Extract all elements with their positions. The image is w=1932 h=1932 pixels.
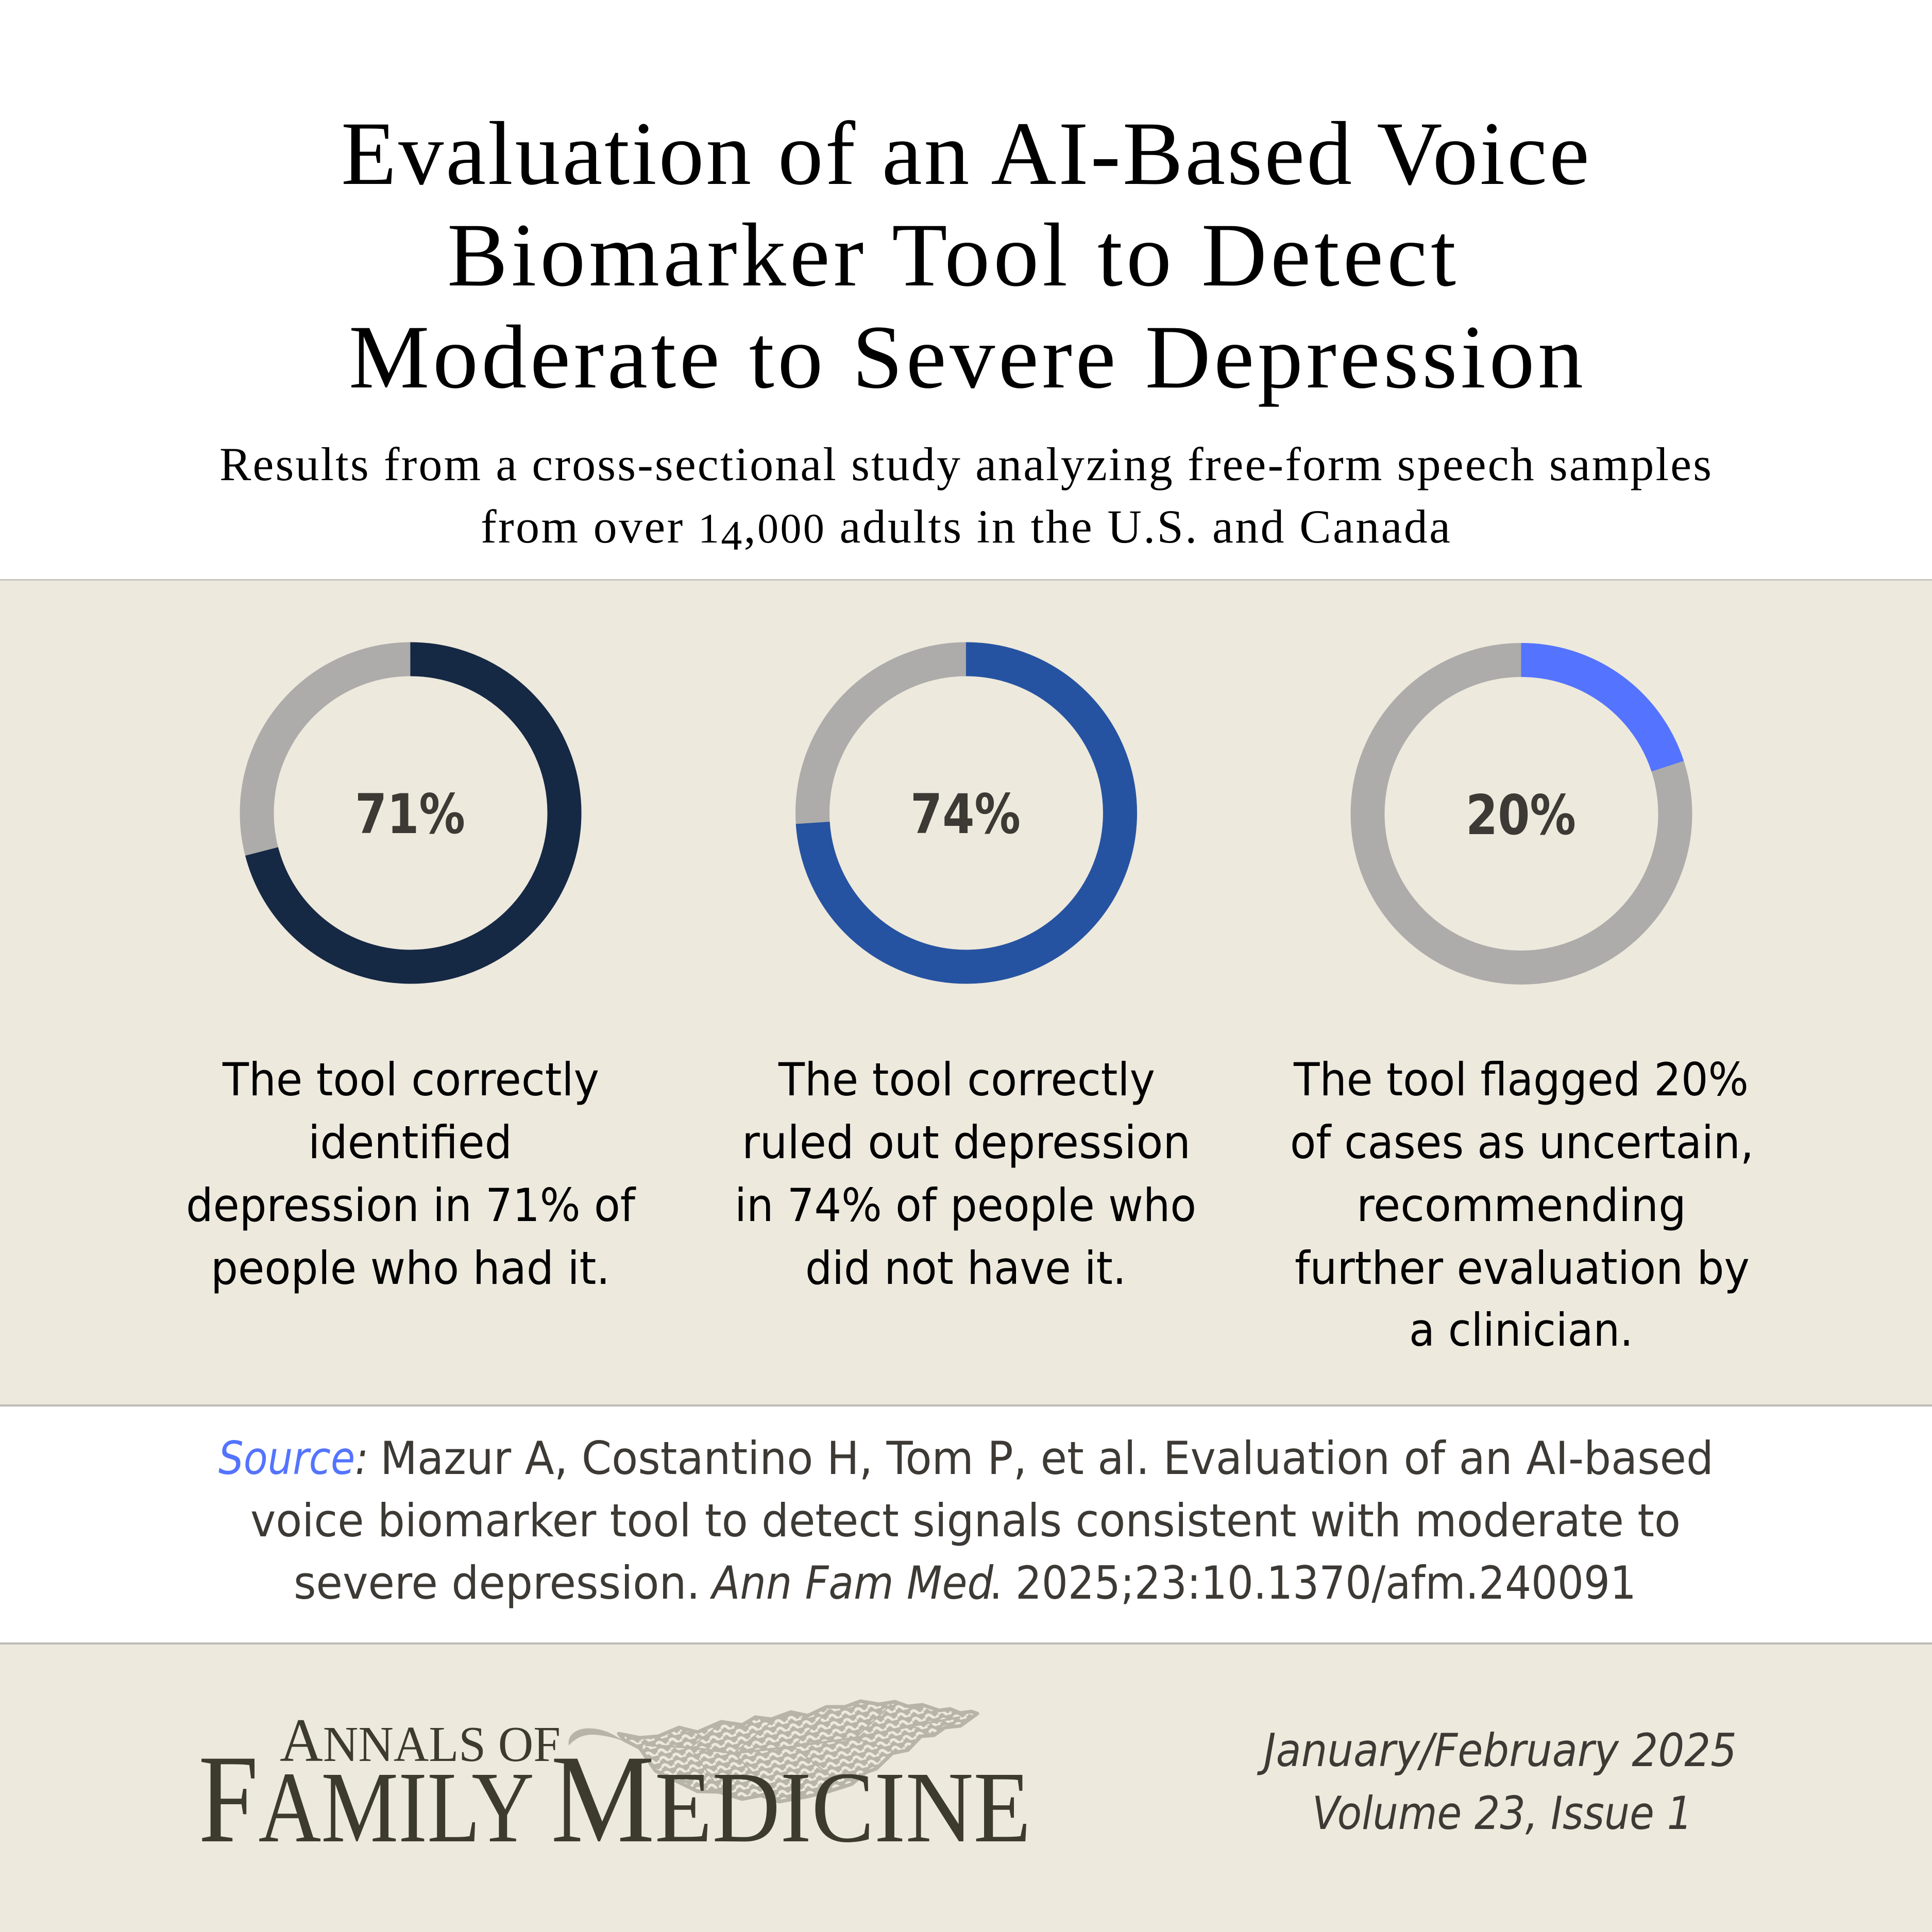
panel: footer: [0, 1642, 1932, 1932]
text: specificity description: ruled out depression: [742, 1116, 1191, 1169]
text: uncertain cases description: a clinician.: [1409, 1303, 1633, 1357]
panel: source citation: Mazur A, Costantino H, Tom P, et al. Evaluation of an AI-based: [380, 1432, 1714, 1485]
subtitle: Results from a cross-sectional study analyzing free-form speech samples: [219, 438, 1711, 490]
panel: source citation: Ann Fam Med: [709, 1556, 994, 1609]
donut chart: 74%: 74%: [910, 783, 1021, 846]
title: Biomarker Tool to Detect: [447, 205, 1456, 306]
donut chart: 74%: [812, 659, 1120, 967]
panel: source citation: severe depression.: [294, 1556, 700, 1609]
donut chart: 71%: 71%: [355, 783, 465, 846]
text: uncertain cases description: [1290, 1053, 1754, 1357]
text: issue date: Volume 23, Issue 1: [1312, 1787, 1692, 1840]
text: uncertain cases description: further evaluation by: [1295, 1242, 1750, 1295]
text: uncertain cases description: of cases as uncertain,: [1290, 1116, 1754, 1169]
title: [341, 104, 1589, 408]
title: Moderate to Severe Depression: [349, 307, 1583, 408]
subtitle: 4: [721, 512, 742, 559]
text: sensitivity description: people who had it.: [211, 1242, 610, 1295]
text: specificity description: did not have it.: [805, 1242, 1126, 1295]
text: sensitivity description: identified: [308, 1116, 512, 1169]
donut chart: 20%: 20%: [1466, 784, 1576, 847]
text: uncertain cases description: recommending: [1357, 1179, 1686, 1232]
panel: source citation: voice biomarker tool to detect signals consistent with moderate to: [250, 1494, 1681, 1547]
text: specificity description: [735, 1053, 1196, 1295]
donut chart: 20%: [1367, 660, 1675, 968]
subtitle: [219, 438, 1711, 559]
panel: source citation: [0, 1404, 1932, 1642]
text: sensitivity description: depression in 71% of: [186, 1179, 636, 1232]
subtitle: ,: [744, 500, 756, 553]
text: specificity description: in 74% of people who: [735, 1179, 1196, 1232]
subtitle: from over 1: [481, 500, 719, 553]
text: issue date: [1257, 1724, 1737, 1840]
donut chart: 71%: [257, 659, 565, 967]
panel: results: [0, 579, 1932, 1406]
panel: source citation: . 2025;23:10.1370/afm.240091: [989, 1556, 1636, 1609]
panel: source citation: Source:: [218, 1432, 368, 1485]
text: uncertain cases description: The tool flagged 20%: [1293, 1053, 1749, 1106]
text: sensitivity description: The tool correctly: [222, 1053, 599, 1106]
subtitle: 000 adults in the U.S. and Canada: [757, 500, 1450, 553]
logo: Annals of Family Medicine: MEDICINE: [551, 1729, 1031, 1869]
text: specificity description: The tool correctly: [778, 1053, 1155, 1106]
icon: leaf: [569, 1701, 977, 1802]
text: issue date: January/February 2025: [1257, 1724, 1737, 1777]
text: sensitivity description: [186, 1053, 636, 1295]
logo: Annals of Family Medicine: [198, 1701, 1031, 1869]
title: Evaluation of an AI-Based Voice: [341, 104, 1589, 204]
logo: Annals of Family Medicine: FAMILY: [198, 1729, 534, 1869]
logo: Annals of Family Medicine: ANNALS OF: [280, 1706, 561, 1774]
